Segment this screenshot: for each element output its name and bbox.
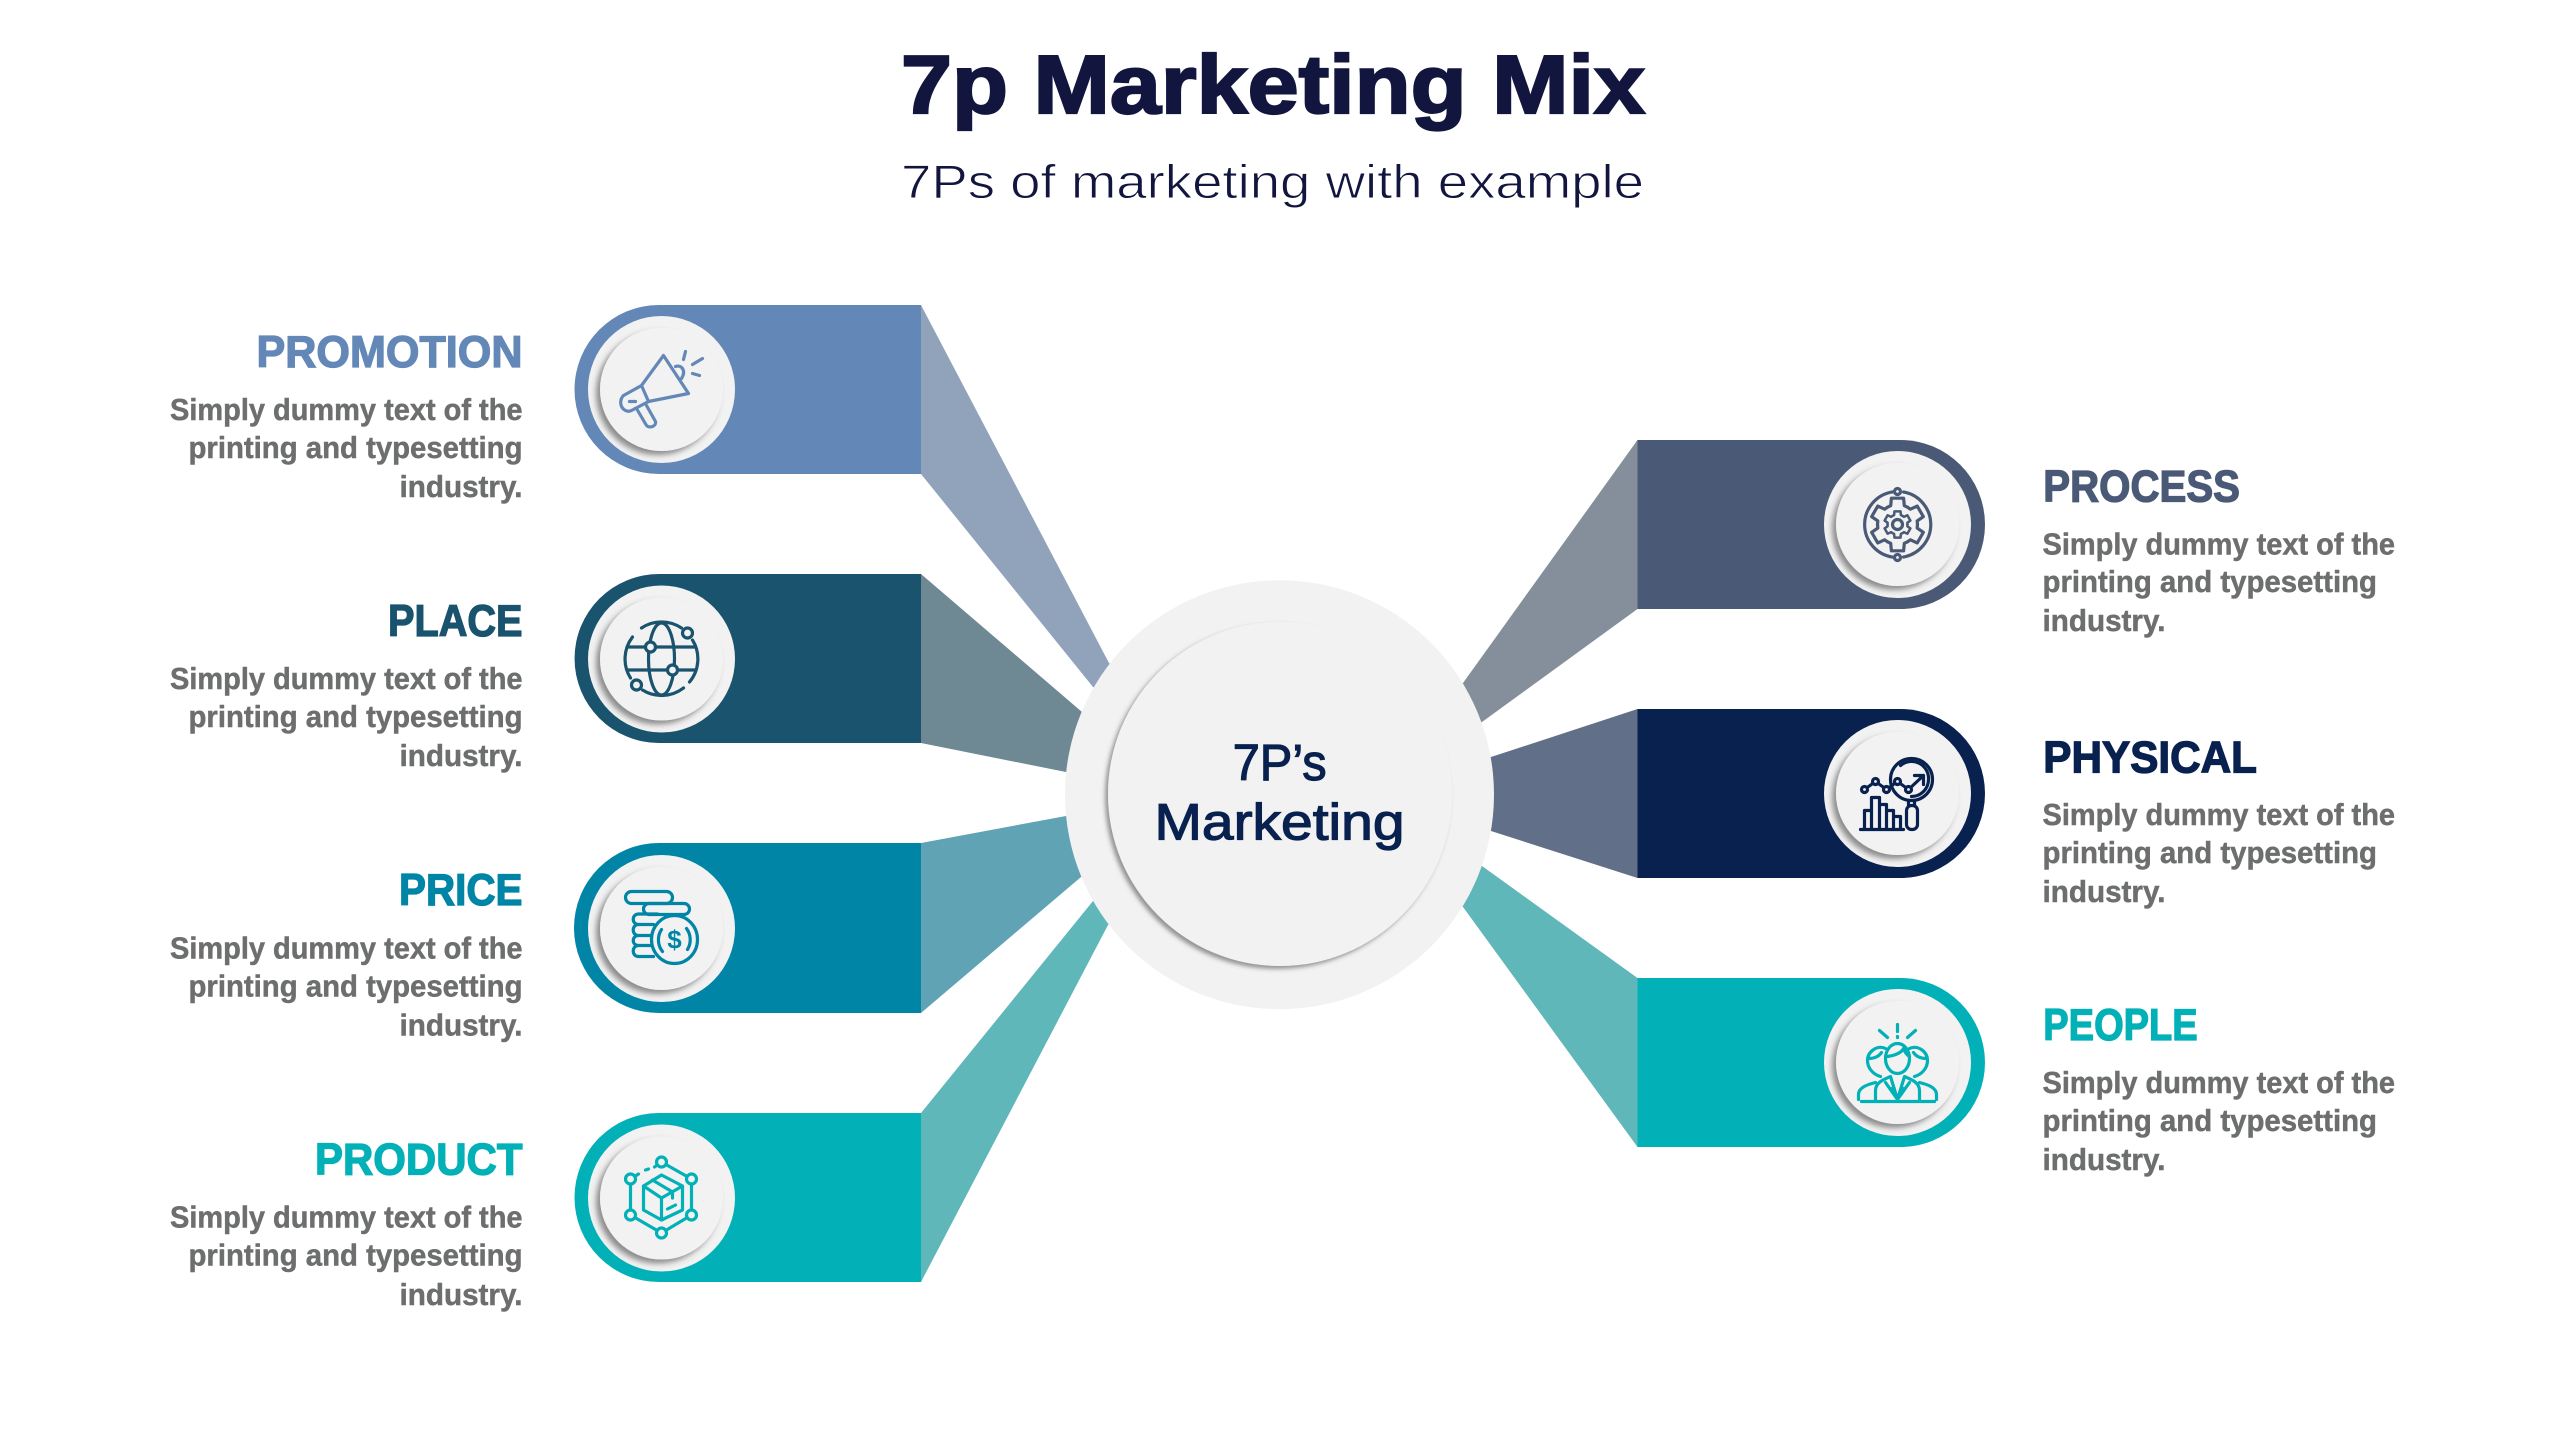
heading: people: PEOPLE	[2043, 1001, 2198, 1050]
heading: process: PROCESS	[2043, 463, 2240, 512]
text: place: Simply dummy text of the	[170, 662, 522, 696]
heading: price: PRICE	[399, 866, 522, 915]
panel: product	[170, 795, 1279, 1312]
text: product: industry.	[400, 1278, 522, 1312]
icon: analytics magnifier	[1860, 758, 1932, 830]
center label: Marketing	[1154, 793, 1404, 850]
connector: place	[921, 574, 1279, 795]
text: process	[2042, 527, 2395, 638]
text: process: printing and typesetting	[2042, 565, 2377, 599]
icon disc: people	[1824, 989, 1971, 1136]
icon: box network	[626, 1157, 696, 1238]
text: physical: industry.	[2042, 875, 2166, 909]
text: people: industry.	[2042, 1143, 2166, 1177]
icon disc: process	[1824, 451, 1971, 598]
icon disc: price	[588, 855, 735, 1002]
text: process: Simply dummy text of the	[2042, 527, 2395, 561]
text: process: industry.	[2042, 604, 2166, 638]
connector: people	[1279, 795, 1638, 1147]
bar: promotion	[574, 305, 921, 474]
text: people: Simply dummy text of the	[2042, 1066, 2395, 1100]
text: price: industry.	[400, 1008, 522, 1042]
icon: team	[1858, 1024, 1936, 1102]
bar: process	[1638, 440, 1985, 609]
text: price: Simply dummy text of the	[170, 932, 522, 966]
heading: place: PLACE	[388, 597, 522, 646]
text: people: printing and typesetting	[2042, 1104, 2377, 1138]
icon: coins	[626, 892, 698, 964]
panel: physical	[1279, 709, 2395, 909]
text: promotion: printing and typesetting	[188, 431, 522, 465]
connector: promotion	[921, 305, 1279, 795]
bar: place	[575, 574, 921, 743]
bar: physical	[1638, 709, 1985, 878]
icon: megaphone	[621, 352, 702, 427]
bar: people	[1638, 978, 1985, 1147]
text: product: Simply dummy text of the	[170, 1200, 522, 1234]
text: price	[170, 932, 522, 1042]
icon: coins: $	[667, 924, 682, 954]
text: promotion: industry.	[400, 470, 522, 504]
bar: product	[574, 1113, 921, 1282]
title: 7p Marketing Mix	[901, 38, 1645, 131]
text: people	[2042, 1066, 2395, 1177]
bar: price	[574, 843, 921, 1013]
icon: globe	[625, 622, 698, 695]
center label: 7P’s	[1233, 734, 1327, 791]
icon: gear	[1865, 488, 1931, 560]
subtitle: 7Ps of marketing with example	[901, 156, 1644, 209]
connector: process	[1279, 440, 1638, 795]
heading: physical: PHYSICAL	[2043, 733, 2257, 782]
panel: price	[170, 795, 1279, 1042]
heading: promotion: PROMOTION	[256, 328, 522, 377]
icon disc: place	[588, 586, 735, 732]
center hub	[1065, 580, 1494, 1009]
text: promotion: Simply dummy text of the	[170, 393, 522, 427]
connector: product	[921, 795, 1279, 1282]
panel: people	[1279, 795, 2395, 1177]
text: promotion	[170, 393, 522, 504]
text: product: printing and typesetting	[188, 1239, 522, 1273]
center label	[1154, 734, 1404, 850]
icon disc: physical	[1824, 720, 1971, 867]
panel: promotion	[170, 305, 1279, 795]
connector: price	[921, 795, 1279, 1013]
panel: place	[170, 574, 1279, 795]
text: place: industry.	[400, 739, 522, 773]
heading: product: PRODUCT	[315, 1135, 522, 1184]
icon disc: product	[588, 1124, 735, 1272]
text: place: printing and typesetting	[188, 700, 522, 734]
icon disc: promotion	[588, 316, 735, 463]
text: physical	[2042, 798, 2395, 909]
text: product	[170, 1200, 522, 1312]
connector: physical	[1279, 709, 1638, 878]
text: physical: printing and typesetting	[2042, 836, 2377, 870]
panel: process	[1279, 440, 2395, 795]
text: physical: Simply dummy text of the	[2042, 798, 2395, 832]
text: place	[170, 662, 522, 773]
text: price: printing and typesetting	[188, 970, 522, 1004]
